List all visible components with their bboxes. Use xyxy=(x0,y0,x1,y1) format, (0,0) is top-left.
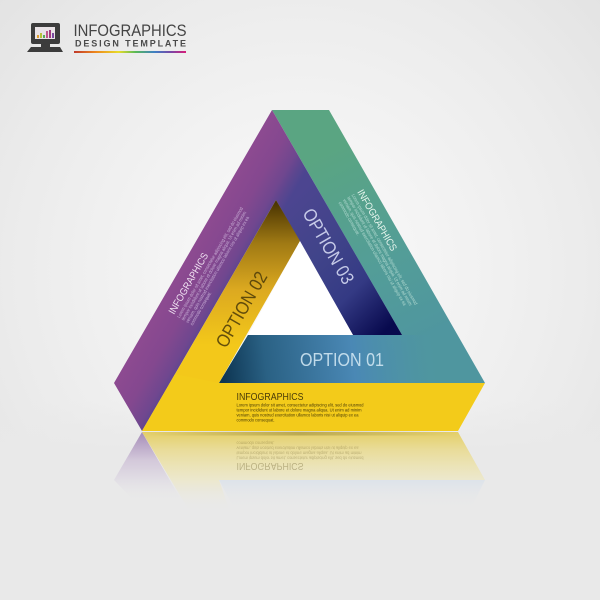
panel: purple arm xyxy=(114,110,402,431)
reflection: text: INFOGRAPHICS xyxy=(236,460,304,471)
text block: teal panel: commodo consequat. xyxy=(337,201,361,237)
text block: teal panel: veniam, quis nostrud exercitation ullamco laboris nisi ut aliquip ex ea xyxy=(341,198,407,307)
text block: purple panel: veniam, quis nostrud exercitation ullamco laboris nisi ut aliquip ex ea xyxy=(185,215,251,324)
text block: purple panel: tempor incididunt ut labore et dolore magna aliqua. Ut enim ad minim xyxy=(180,210,248,322)
text block: purple panel: INFOGRAPHICS xyxy=(167,251,211,316)
floor xyxy=(0,400,600,600)
text block: yellow panel xyxy=(236,392,364,424)
reflection: text: Lorem ipsum dolor sit amet, consectetur adipiscing elit, sed do eiusmod xyxy=(236,454,364,460)
logo subtitle: DESIGN TEMPLATE xyxy=(75,38,186,48)
impossible triangle xyxy=(114,110,485,431)
text block: purple panel: commodo consequat. xyxy=(189,291,213,327)
panel: teal arm xyxy=(219,110,485,383)
label: option 01: OPTION 01 xyxy=(300,349,384,370)
reflection: blue xyxy=(219,480,485,510)
panel: blue band option 01 xyxy=(219,335,485,383)
label: option 03: OPTION 03 xyxy=(299,204,359,288)
reflection: text xyxy=(236,440,364,471)
text block: teal panel: INFOGRAPHICS xyxy=(354,188,399,254)
label: option 02: OPTION 02 xyxy=(211,268,271,351)
panel: white centre xyxy=(248,241,353,335)
reflection: purple xyxy=(114,432,180,502)
icon: computer monitor with chart xyxy=(27,23,63,52)
panel: navy band option 03 xyxy=(272,110,402,335)
reflection: text: commodo consequat. xyxy=(236,440,274,446)
reflection: text: tempor incididunt ut labore et dolore magna aliqua. Ut enim ad minim xyxy=(236,450,362,456)
rainbow line xyxy=(74,51,186,53)
reflection: top shadow xyxy=(142,432,458,436)
text block: teal panel: Lorem ipsum dolor sit amet, consectetur adipiscing elit, sed do eiusmod xyxy=(350,193,418,306)
reflection: text: veniam, quis nostrud exercitation ullamco laboris nisi ut aliquip ex ea xyxy=(236,444,359,450)
text block: yellow panel: tempor incididunt ut labore et dolore magna aliqua. Ut enim ad minim xyxy=(236,408,362,414)
reflection xyxy=(114,432,485,512)
text block: yellow panel: INFOGRAPHICS xyxy=(236,392,304,403)
header logo xyxy=(27,21,186,53)
text block: teal panel: tempor incididunt ut labore et dolore magna aliqua. Ut enim ad minim xyxy=(345,196,413,307)
text block: yellow panel: commodo consequat. xyxy=(236,418,274,424)
panel: yellow base xyxy=(142,374,485,431)
reflection: yellow xyxy=(142,432,485,512)
logo title: INFOGRAPHICS xyxy=(74,21,186,40)
panel: yellow band option 02 xyxy=(142,200,300,431)
text block: yellow panel: Lorem ipsum dolor sit amet, consectetur adipiscing elit, sed do eiusmod xyxy=(236,402,364,408)
text block: purple panel: Lorem ipsum dolor sit amet, consectetur adipiscing elit, sed do eiusmod xyxy=(176,206,245,319)
text block: yellow panel: veniam, quis nostrud exercitation ullamco laboris nisi ut aliquip ex ea xyxy=(236,412,359,418)
